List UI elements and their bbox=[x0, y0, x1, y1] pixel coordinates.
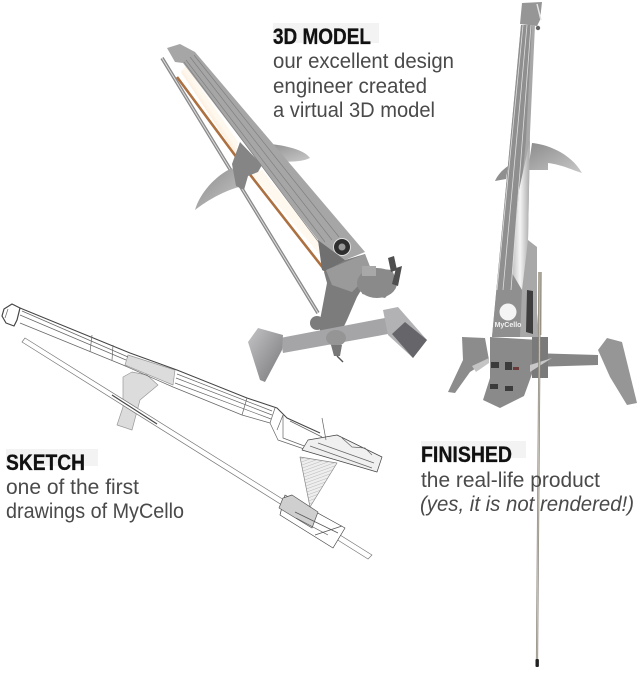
text: sketch label: SKETCH bbox=[6, 450, 85, 475]
finished: fingerboard bbox=[492, 25, 532, 337]
finished: tuner machinery bbox=[472, 358, 552, 391]
text: finished label: FINISHED bbox=[421, 442, 512, 467]
sketch: shaded neck joint and chin rest bbox=[117, 355, 175, 430]
finished: strings bbox=[497, 25, 531, 290]
3D: upper wing bbox=[260, 144, 310, 162]
3D: neck bbox=[167, 44, 365, 260]
text: 3D model label: 3D MODEL bbox=[273, 24, 371, 49]
text: sketch label bbox=[6, 449, 184, 523]
finished: left wing bbox=[495, 166, 508, 181]
text: 3D model label: engineer created bbox=[273, 75, 427, 98]
3D: wooden back strip bbox=[177, 77, 327, 273]
finished: left foot bbox=[448, 337, 489, 393]
3D: right foot bbox=[383, 307, 427, 358]
3D: wing root bbox=[232, 142, 262, 190]
sketch: hatched support bbox=[300, 457, 337, 507]
finished: logo bbox=[495, 304, 521, 329]
text: finished label: the real-life product bbox=[421, 469, 600, 492]
text: sketch label: one of the first bbox=[6, 476, 139, 499]
3D: crossbar bbox=[280, 318, 388, 353]
finished: logo: MyCello bbox=[495, 322, 521, 329]
3D: long rod bbox=[162, 58, 318, 313]
3D: cream gap tint, lower bbox=[250, 170, 326, 262]
image: finished MyCello photo bbox=[448, 2, 637, 667]
finished: rod tip bbox=[536, 659, 539, 667]
text: 3D model label: our excellent design bbox=[273, 50, 454, 73]
sketch: neck outline bbox=[2, 304, 322, 450]
3D: lower wing bbox=[195, 168, 243, 210]
3D: cream gap tint, upper bbox=[181, 66, 238, 155]
image: sketch line drawing of MyCello bbox=[2, 304, 382, 559]
finished: arm to right foot bbox=[530, 353, 598, 367]
finished: lower body bbox=[483, 337, 540, 408]
3D: tuning machinery bbox=[357, 256, 402, 298]
sketch: lower block bbox=[280, 495, 345, 548]
3D: left foot bbox=[248, 328, 283, 382]
sketch: tailpiece block bbox=[302, 435, 382, 472]
finished: body and neck base bbox=[492, 25, 539, 337]
text: finished label: (yes, it is not rendered!) bbox=[420, 493, 634, 516]
finished: right foot bbox=[598, 338, 637, 405]
text: 3D model label bbox=[273, 23, 454, 122]
finished: pickup slot bbox=[526, 290, 533, 334]
3D: end pin bbox=[310, 316, 346, 362]
finished: scroll head bbox=[520, 2, 542, 26]
finished: end pin rod bbox=[538, 272, 542, 335]
text: finished label bbox=[420, 441, 634, 516]
3D: logo badge bbox=[334, 238, 350, 256]
3D: body column bbox=[318, 240, 345, 275]
sketch: bow rod bbox=[22, 338, 372, 559]
finished: chrome strip bbox=[512, 140, 530, 290]
text: sketch label: drawings of MyCello bbox=[6, 500, 184, 523]
image: 3D model of MyCello bbox=[162, 44, 427, 382]
text: 3D model label: a virtual 3D model bbox=[273, 99, 435, 122]
finished: right wing bbox=[528, 143, 582, 173]
finished: collar bbox=[532, 337, 548, 378]
